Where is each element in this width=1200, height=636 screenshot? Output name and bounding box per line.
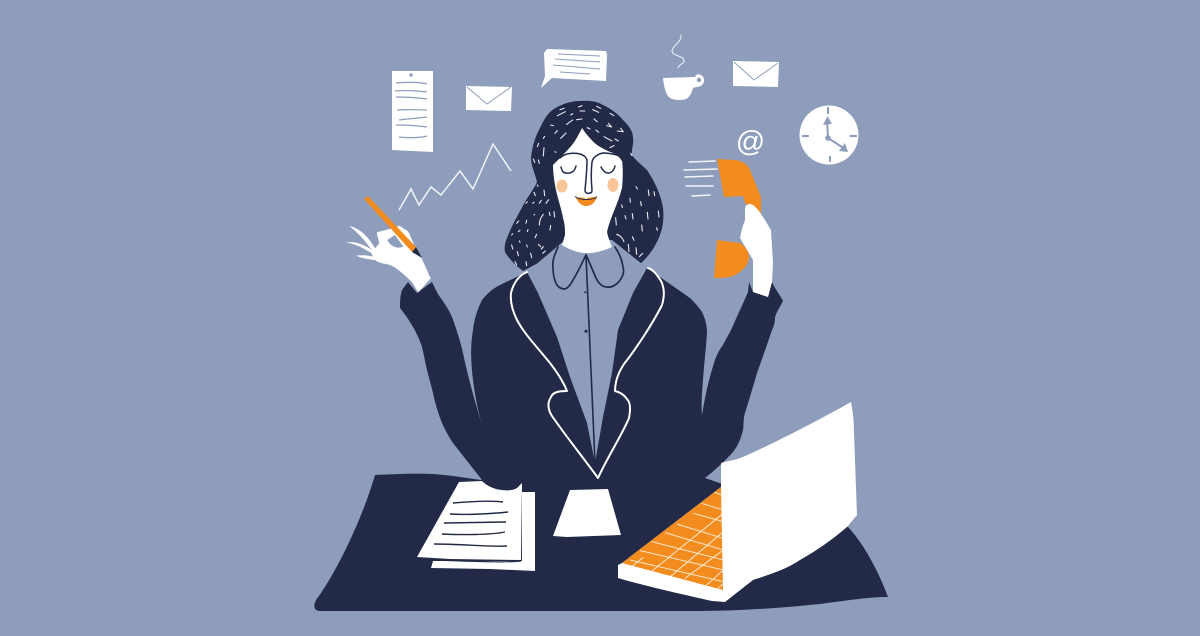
face [553, 128, 623, 253]
at sign: @ [736, 126, 765, 158]
pencil [364, 196, 422, 258]
back sheet [431, 492, 535, 571]
clock [800, 106, 858, 164]
paper lines [434, 501, 508, 546]
envelope left [466, 86, 512, 111]
facial features [560, 153, 622, 193]
lips [575, 196, 597, 206]
lapels [511, 268, 664, 478]
document note [392, 71, 433, 152]
left hand with pencil [346, 196, 431, 292]
front sheet [417, 481, 522, 560]
speech lines [684, 161, 717, 196]
envelope right [733, 61, 779, 87]
line chart [399, 144, 511, 210]
right arm sleeve [680, 282, 783, 478]
hand [346, 226, 431, 292]
hair [505, 101, 663, 271]
cheeks [556, 178, 618, 192]
collar and placket [553, 247, 624, 463]
keyboard [622, 487, 723, 590]
right hand [740, 204, 773, 297]
shirt buttons [584, 291, 588, 333]
desk [314, 474, 888, 611]
laptop body [618, 402, 857, 602]
shirt [527, 240, 647, 463]
hair flecks [512, 106, 659, 266]
speech bubble [541, 49, 607, 88]
telephone handset [714, 159, 761, 278]
woman [400, 101, 783, 485]
white trapezoid [553, 489, 621, 537]
laptop [615, 402, 857, 602]
left arm sleeve [400, 282, 510, 485]
papers [417, 481, 535, 571]
illustration: calm multitasking woman at desk [314, 34, 888, 611]
jacket body [471, 268, 707, 484]
coffee cup [663, 35, 704, 100]
